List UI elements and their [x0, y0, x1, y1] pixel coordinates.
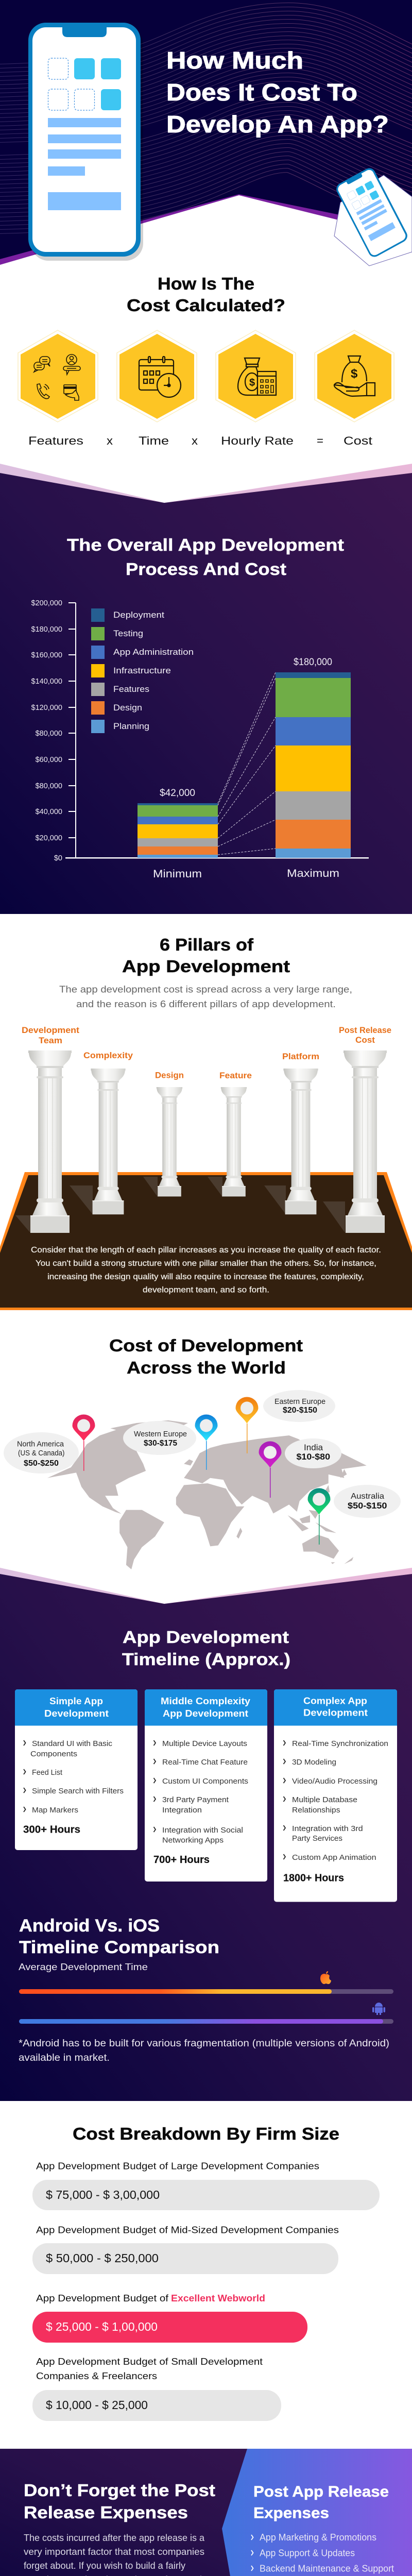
- icon: map pin north america: [72, 1415, 95, 1471]
- bubble: eastern europe: [263, 1390, 335, 1422]
- heading: The Overall App Development: [67, 535, 344, 554]
- icon: android: [372, 2003, 385, 2015]
- icon: map pin india: [259, 1441, 281, 1498]
- heading: timeline: App Development: [123, 1628, 289, 1647]
- card: middle complexity app: App Development: [163, 1708, 248, 1719]
- bubble: north america: North America: [17, 1439, 64, 1449]
- icon: calendar and clock: [139, 357, 181, 397]
- card: simple app: Feed List: [32, 1768, 63, 1777]
- text: pillars explanation: Consider that the length of each pillar increases as you increase the quality of each factor.: [31, 1246, 381, 1255]
- y axis: $140,000: [31, 677, 62, 686]
- bar: minimum: [138, 788, 218, 880]
- pillar: development team: Team: [39, 1036, 62, 1045]
- y axis: $200,000: [31, 599, 62, 607]
- bubble: north america: [4, 1432, 79, 1473]
- text: pillars explanation: You can't build a strong structure with one pillar smaller than the others. So, for instance,: [36, 1259, 376, 1268]
- icon: chat bubbles: [34, 357, 50, 372]
- bubble: north america: (US & Canada): [18, 1449, 65, 1458]
- heading: cost across the world: [109, 1336, 303, 1377]
- pillar: development team: [22, 1025, 79, 1233]
- text: post release body: The costs incurred after the app release is a: [24, 2533, 205, 2543]
- panel: hero background: [0, 0, 412, 289]
- formula labels: x: [107, 434, 113, 447]
- card: simple app: Standard UI with Basic: [32, 1739, 112, 1748]
- bubble: australia: Australia: [351, 1492, 384, 1501]
- y axis: $180,000: [31, 625, 62, 634]
- budget: excellent webworld: Excellent Webworld: [171, 2293, 265, 2303]
- bar: minimum: Minimum: [153, 868, 202, 880]
- formula labels: Features: [28, 434, 83, 447]
- card: complex app: Real-Time Synchronization: [292, 1739, 388, 1748]
- card: complex app: Complex App: [303, 1696, 367, 1706]
- bubble: eastern europe: $20-$150: [283, 1406, 317, 1415]
- chart legend: Infrastructure: [113, 666, 171, 675]
- text: pillars explanation: development team, and so forth.: [143, 1286, 269, 1294]
- title: [166, 47, 389, 138]
- y axis: $0: [54, 854, 62, 862]
- bubble: india: India: [304, 1443, 323, 1452]
- formula labels: Time: [139, 434, 169, 447]
- y axis: $60,000: [36, 756, 62, 764]
- formula labels: x: [192, 434, 198, 447]
- card: complex app: Development: [303, 1707, 368, 1718]
- formula labels: =: [317, 434, 323, 447]
- icon: money bag and calculator: $: [249, 377, 255, 388]
- pillar: post release cost: [339, 1025, 391, 1233]
- chart legend: Testing: [113, 629, 143, 638]
- card: complex app: Video/Audio Processing: [292, 1777, 377, 1786]
- pillar: development team: Development: [22, 1025, 79, 1035]
- icon: map pin western europe: [195, 1415, 217, 1470]
- card: middle complexity app: Middle Complexity: [161, 1696, 250, 1706]
- list: post app release expenses: App Marketing & Promotions: [260, 2532, 376, 2543]
- formula labels: [28, 434, 372, 447]
- icon: apple: [320, 1971, 331, 1984]
- card: middle complexity app: Integration: [162, 1806, 202, 1815]
- chart legend: Planning: [113, 722, 149, 731]
- heading: cost across the world: Across the World: [127, 1358, 286, 1377]
- heading: timeline: [122, 1628, 290, 1669]
- formula labels: Hourly Rate: [221, 434, 294, 447]
- pillar: complexity: Complexity: [83, 1050, 133, 1060]
- text: pillars intro: The app development cost is spread across a very large range,: [59, 984, 352, 994]
- bar: android time: [19, 2019, 393, 2024]
- list: post app release expenses: Backend Maintenance & Support: [260, 2564, 394, 2574]
- text: post release body: very important factor that most companies: [24, 2547, 204, 2557]
- heading: do not forget: [24, 2481, 215, 2522]
- bubble: australia: [334, 1485, 401, 1518]
- budget: large companies: [32, 2161, 380, 2210]
- card: complex app: 3D Modeling: [292, 1758, 336, 1767]
- bubble: india: [285, 1438, 341, 1468]
- card: complex app: Party Services: [292, 1834, 342, 1843]
- pillar: design: Design: [155, 1071, 184, 1080]
- card: simple app: 300+ Hours: [23, 1824, 80, 1835]
- card: simple app: Map Markers: [32, 1806, 78, 1815]
- text: android note: *Android has to be built for various fragmentation (multiple versions of Android): [19, 2038, 389, 2049]
- chart legend: Deployment: [113, 611, 164, 620]
- icon: money bag on hand: $: [351, 367, 358, 381]
- heading: cost across the world: Cost of Development: [109, 1336, 303, 1355]
- title: Develop An App?: [166, 111, 389, 138]
- budget: large companies: $ 75,000 - $ 3,00,000: [46, 2188, 160, 2201]
- panel: timeline and comparison: [0, 1568, 412, 2101]
- card: complex app: Relationships: [292, 1806, 340, 1815]
- budget: small companies: Companies & Freelancers: [36, 2371, 157, 2381]
- y axis: $120,000: [31, 704, 62, 712]
- text: average development time: Average Development Time: [19, 1962, 148, 1972]
- bar: maximum: $180,000: [294, 657, 332, 668]
- heading: 6 pillars: [122, 935, 290, 976]
- heading: post app release: Post App Release: [253, 2483, 389, 2500]
- wave line pattern: [0, 88, 412, 155]
- heading: timeline: Timeline (Approx.): [122, 1650, 290, 1669]
- heading: android vs ios: Timeline Comparison: [19, 1938, 219, 1957]
- heading: post app release: [253, 2483, 389, 2521]
- bar: maximum: [276, 657, 351, 879]
- phone illustration: large: [28, 23, 143, 261]
- pillar: post release cost: Post Release: [339, 1025, 391, 1035]
- chart legend: App Administration: [113, 648, 194, 657]
- text: android note: [19, 2038, 389, 2063]
- y axis: $80,000: [36, 730, 62, 738]
- heading: how is the cost calculated: Cost Calculated?: [127, 296, 285, 315]
- heading: how is the cost calculated: How Is The: [158, 274, 254, 293]
- icon: money bag on hand: [334, 356, 375, 396]
- card: complex app: Custom App Animation: [292, 1853, 376, 1862]
- icon: map pin eastern europe: [236, 1397, 259, 1453]
- heading: 6 pillars: 6 Pillars of: [160, 935, 254, 954]
- card: middle complexity app: Real-Time Chat Feature: [162, 1758, 248, 1767]
- heading: [67, 535, 344, 579]
- chart legend: Features: [113, 685, 149, 694]
- bubble: western europe: $30-$175: [144, 1439, 177, 1448]
- card: middle complexity app: Networking Apps: [162, 1836, 224, 1844]
- y axis: $80,000: [36, 782, 62, 790]
- hexagon: features: [18, 330, 98, 422]
- phone illustration: small tilted: [334, 166, 409, 259]
- list: post app release expenses: [251, 2532, 394, 2576]
- budget: excellent webworld: [32, 2293, 307, 2343]
- bubble: australia: $50-$150: [348, 1501, 387, 1511]
- card: middle complexity app: [145, 1689, 267, 1882]
- card: middle complexity app: Multiple Device Layouts: [162, 1739, 247, 1748]
- text: pillars intro: [59, 984, 352, 1009]
- budget: mid-sized companies: App Development Budget of Mid-Sized Development Companies: [36, 2225, 339, 2235]
- text: post release body: [24, 2533, 216, 2576]
- panel: overall process and cost: [0, 464, 412, 914]
- card: complex app: Multiple Database: [292, 1795, 357, 1804]
- title: How Much: [166, 47, 303, 74]
- bar: minimum: $42,000: [160, 788, 195, 799]
- card: middle complexity app: Integration with Social: [162, 1826, 243, 1835]
- text: android note: available in market.: [19, 2053, 110, 2063]
- hexagon: time: [117, 330, 197, 422]
- heading: do not forget: Release Expenses: [24, 2503, 188, 2522]
- card: middle complexity app: Custom UI Components: [162, 1777, 248, 1786]
- icon: money bag and calculator: [238, 358, 276, 395]
- title: Does It Cost To: [166, 79, 357, 106]
- pillar: platform: Platform: [282, 1052, 319, 1061]
- icon: map pin australia: [308, 1488, 331, 1545]
- heading: cost breakdown: Cost Breakdown By Firm Size: [73, 2124, 339, 2143]
- text: pillars explanation: [31, 1246, 381, 1294]
- card: middle complexity app: 3rd Party Payment: [162, 1795, 229, 1804]
- icon: user login: [63, 354, 80, 375]
- heading: android vs ios: [19, 1916, 219, 1957]
- heading: do not forget: Don’t Forget the Post: [24, 2481, 215, 2500]
- text: pillars explanation: increasing the design quality will also require to increase the features, complexity,: [47, 1273, 364, 1281]
- dashed connectors: [218, 672, 276, 855]
- card: simple app: Simple App: [49, 1696, 103, 1706]
- y axis: $20,000: [36, 834, 62, 842]
- card: middle complexity app: 700+ Hours: [153, 1854, 210, 1866]
- bubble: north america: $50-$250: [24, 1459, 59, 1468]
- card: complex app: 1800+ Hours: [283, 1872, 344, 1884]
- card: complex app: Integration with 3rd: [292, 1824, 363, 1833]
- budget: excellent webworld: $ 25,000 - $ 1,00,000: [46, 2320, 158, 2333]
- y axis: [31, 599, 369, 862]
- budget: small companies: [32, 2357, 281, 2421]
- chart legend: [91, 608, 194, 733]
- pillar: post release cost: Cost: [355, 1035, 375, 1045]
- pillar: design: [155, 1071, 184, 1196]
- icon: phone: [37, 384, 49, 399]
- budget: small companies: $ 10,000 - $ 25,000: [46, 2398, 148, 2412]
- bubble: eastern europe: Eastern Europe: [274, 1397, 325, 1406]
- icon: card and hand: [64, 385, 79, 400]
- pillar: feature: [219, 1071, 252, 1196]
- bar: maximum: Maximum: [287, 868, 339, 879]
- budget: mid-sized companies: [32, 2225, 339, 2274]
- chart legend: Design: [113, 703, 142, 713]
- pillar: platform: [282, 1052, 319, 1214]
- heading: how is the cost calculated: [127, 274, 285, 315]
- card: simple app: Development: [44, 1708, 109, 1719]
- panel: cost hexagons: [18, 330, 394, 422]
- budget: large companies: App Development Budget of Large Development Companies: [36, 2161, 319, 2171]
- card: complex app: [274, 1689, 397, 1902]
- heading: post app release: Expenses: [253, 2505, 329, 2521]
- card: simple app: [15, 1689, 138, 1850]
- hexagon: cost: [315, 330, 394, 422]
- world map: [47, 1420, 367, 1569]
- y axis: $40,000: [36, 808, 62, 816]
- pillar: feature: Feature: [219, 1071, 252, 1080]
- bubble: india: $10-$80: [297, 1452, 330, 1462]
- y axis: $160,000: [31, 651, 62, 659]
- heading: android vs ios: Android Vs. iOS: [19, 1916, 160, 1936]
- card: simple app: Simple Search with Filters: [32, 1787, 124, 1795]
- budget: excellent webworld: App Development Budget of: [36, 2293, 169, 2303]
- heading: Process And Cost: [126, 560, 286, 579]
- heading: 6 pillars: App Development: [122, 957, 290, 976]
- budget: small companies: App Development Budget of Small Development: [36, 2357, 263, 2367]
- formula labels: Cost: [344, 434, 372, 447]
- bubble: western europe: [123, 1421, 196, 1455]
- bar: ios time: [19, 1989, 393, 1994]
- text: pillars intro: and the reason is 6 different pillars of app development.: [76, 999, 336, 1009]
- floor platform: [0, 1172, 412, 1310]
- pillar: complexity: [83, 1050, 133, 1214]
- hexagon: hourly rate: [216, 330, 296, 422]
- text: post release body: forget about. If you wish to build a fairly: [24, 2561, 185, 2571]
- card: simple app: Components: [30, 1750, 77, 1758]
- bubble: western europe: Western Europe: [134, 1430, 187, 1438]
- budget: mid-sized companies: $ 50,000 - $ 250,000: [46, 2251, 159, 2265]
- list: post app release expenses: App Support & Updates: [260, 2548, 355, 2558]
- panel: post release expenses: [0, 2449, 412, 2576]
